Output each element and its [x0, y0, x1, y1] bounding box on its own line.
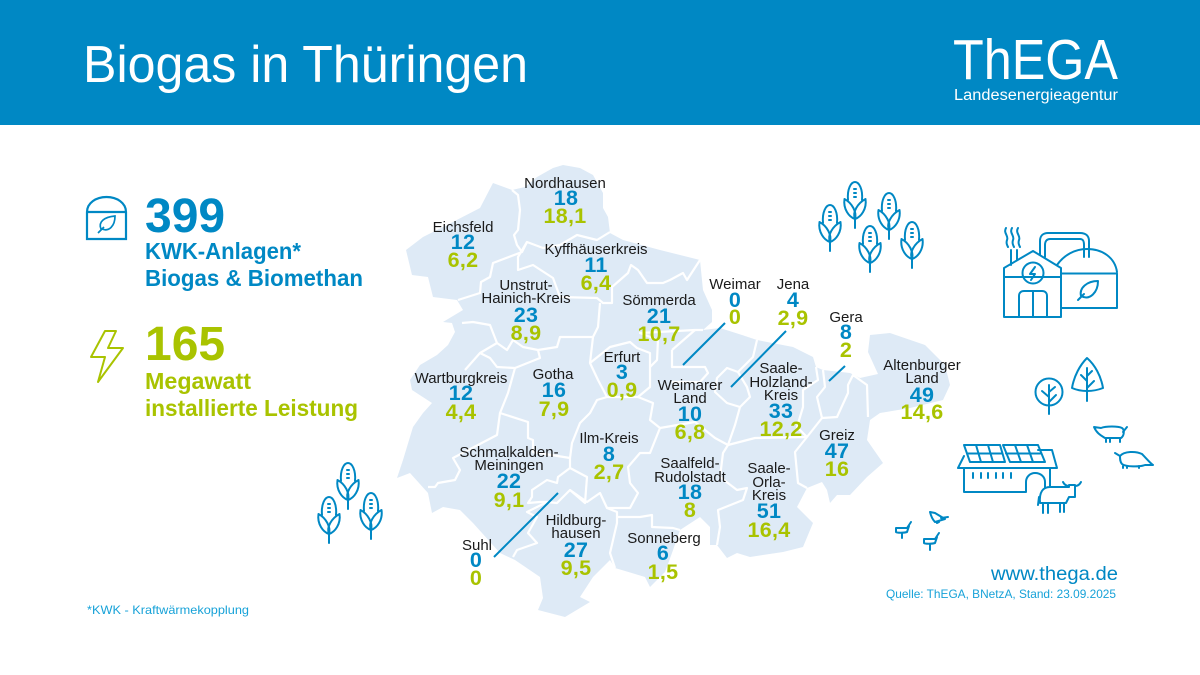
label: Gotha: Gotha — [533, 366, 574, 383]
stat: KWK plants — [87, 190, 363, 291]
label: Kyffhäuserkreis: 6,4 — [581, 271, 611, 295]
label: Saalfeld-Rudolstadt: 18 — [678, 480, 702, 504]
label: Ilm-Kreis: Ilm-Kreis — [579, 430, 639, 447]
label: Schmalkalden-Meiningen: Meiningen — [474, 457, 544, 474]
label: Sömmerda: Sömmerda — [622, 292, 696, 309]
label: Schmalkalden-Meiningen — [459, 444, 559, 512]
label: Eichsfeld: 12 — [451, 230, 475, 254]
label: Suhl: 0 — [470, 548, 482, 572]
label: Hildburghausen — [546, 512, 606, 580]
icon: pointed tree — [1072, 358, 1103, 401]
label: Schmalkalden-Meiningen: Schmalkalden- — [459, 444, 559, 461]
number 399: 399 — [145, 190, 225, 243]
label: Altenburger Land: Altenburger — [883, 357, 961, 374]
label: Gera: 8 — [840, 320, 852, 344]
leader line: Gera — [829, 366, 845, 381]
caption: Megawatt — [145, 368, 251, 394]
label: Weimarer Land: Land — [673, 390, 707, 407]
label: Weimarer Land: 10 — [678, 402, 702, 426]
label: Saale-Holzland-Kreis: Saale- — [759, 360, 803, 377]
label: Ilm-Kreis: 8 — [603, 442, 615, 466]
icon: corn group bottom left — [318, 463, 382, 543]
label: Nordhausen — [524, 175, 606, 228]
label: Jena: Jena — [777, 276, 810, 293]
label: Schmalkalden-Meiningen: 9,1 — [494, 488, 524, 512]
label: Erfurt — [604, 349, 641, 402]
label: Kyffhäuserkreis: 11 — [584, 253, 608, 277]
label: Saale-Holzland-Kreis: Holzland- — [749, 374, 813, 391]
label: Unstrut-Hainich-Kreis — [481, 277, 571, 345]
label: Unstrut-Hainich-Kreis: 8,9 — [511, 321, 541, 345]
label: Saalfeld-Rudolstadt: 8 — [684, 498, 696, 522]
label: Sömmerda — [622, 292, 696, 346]
label: Weimar — [709, 276, 761, 329]
label: Sonneberg: 1,5 — [648, 560, 678, 584]
label: Sömmerda: 21 — [647, 304, 671, 328]
label: Weimar: 0 — [729, 305, 741, 329]
label: Gera — [829, 309, 863, 362]
label: Saale-Orla-Kreis — [747, 460, 791, 542]
label: Saale-Holzland-Kreis: 33 — [769, 399, 793, 423]
label: Saalfeld-Rudolstadt — [654, 455, 727, 522]
label: Erfurt: Erfurt — [604, 349, 641, 366]
caption: installierte Leistung — [145, 395, 358, 421]
label: Sonneberg: Sonneberg — [627, 530, 701, 547]
label: Saale-Orla-Kreis: 51 — [757, 499, 781, 523]
label: Sömmerda: 10,7 — [637, 322, 681, 346]
icon: round tree — [1036, 378, 1062, 414]
label: Saalfeld-Rudolstadt: Saalfeld- — [660, 455, 720, 472]
label: Nordhausen: Nordhausen — [524, 175, 606, 192]
label: Kyffhäuserkreis: Kyffhäuserkreis — [544, 241, 648, 258]
icon: barn with solar roof — [958, 445, 1057, 492]
label: Wartburgkreis — [415, 370, 507, 424]
caption: KWK-Anlagen* — [145, 238, 301, 264]
leader line: Jena — [731, 331, 786, 387]
label: Altenburger Land: 49 — [910, 383, 934, 407]
website: www.thega.de — [990, 563, 1118, 585]
label: Kyffhäuserkreis — [544, 241, 648, 295]
label: Altenburger Land: 14,6 — [900, 400, 944, 424]
caption — [145, 238, 363, 291]
label: Greiz: 16 — [825, 457, 849, 481]
title: Biogas in Thüringen — [83, 36, 528, 94]
label: Jena: 2,9 — [778, 306, 808, 330]
label: Gera: 2 — [840, 338, 852, 362]
label: Erfurt: 3 — [616, 360, 628, 384]
leader line: Suhl — [494, 493, 558, 557]
label: Eichsfeld: 6,2 — [448, 248, 478, 272]
label: Saale-Holzland-Kreis: Kreis — [764, 387, 798, 404]
label: Jena — [777, 276, 810, 330]
icon: goose 3 — [924, 533, 939, 550]
label: Hildburghausen: Hildburg- — [546, 512, 606, 529]
logo: ThEGA: Landesenergieagentur — [954, 87, 1118, 104]
icon: lightning bolt — [91, 331, 123, 382]
icon: goose 2 — [896, 522, 911, 538]
label: Nordhausen: 18 — [554, 186, 578, 210]
icon: corn group top right — [819, 182, 923, 272]
logo: ThEGA: ThEGA — [953, 28, 1118, 92]
label: Saale-Orla-Kreis: 16,4 — [747, 518, 791, 542]
header banner — [0, 0, 1200, 125]
label: Unstrut-Hainich-Kreis: 23 — [514, 303, 538, 327]
label: Saale-Holzland-Kreis: 12,2 — [759, 417, 803, 441]
label: Gotha: 7,9 — [539, 397, 569, 421]
label: Saale-Orla-Kreis: Orla- — [752, 474, 786, 491]
label: Ilm-Kreis: 2,7 — [594, 460, 624, 484]
label: Suhl — [462, 537, 492, 590]
label: Weimar: Weimar — [709, 276, 761, 293]
icon: biogas plant — [1004, 228, 1117, 317]
label: Unstrut-Hainich-Kreis: Hainich-Kreis — [481, 290, 571, 307]
label: Weimarer Land: 6,8 — [675, 420, 705, 444]
label: Hildburghausen: 27 — [564, 538, 588, 562]
label: Jena: 4 — [787, 288, 799, 312]
label: Suhl: Suhl — [462, 537, 492, 554]
label: Wartburgkreis: 4,4 — [446, 400, 476, 424]
label: Eichsfeld: Eichsfeld — [433, 219, 493, 236]
caption: Biogas & Biomethan — [145, 265, 363, 291]
label: Schmalkalden-Meiningen: 22 — [497, 469, 521, 493]
icon: pig 2 — [1115, 452, 1153, 468]
stat: megawatt — [91, 318, 358, 421]
label: Gera: Gera — [829, 309, 863, 326]
icon: biogas dome — [87, 197, 126, 239]
label: Saalfeld-Rudolstadt: Rudolstadt — [654, 469, 727, 486]
label: Wartburgkreis: Wartburgkreis — [415, 370, 507, 387]
label: Saale-Orla-Kreis: Kreis — [752, 487, 786, 504]
label: Gotha — [533, 366, 574, 421]
label: Altenburger Land — [883, 357, 961, 424]
footnote: *KWK - Kraftwärmekopplung — [87, 603, 249, 617]
label: Weimar: 0 — [729, 288, 741, 312]
label: Weimarer Land: Weimarer — [658, 377, 722, 394]
label: Suhl: 0 — [470, 566, 482, 590]
label: Greiz: 47 — [825, 439, 849, 463]
leader line: Weimar — [683, 323, 725, 365]
label: Sonneberg: 6 — [657, 541, 669, 565]
label: Saale-Orla-Kreis: Saale- — [747, 460, 791, 477]
label: Unstrut-Hainich-Kreis: Unstrut- — [499, 277, 553, 294]
label: Altenburger Land: Land — [905, 370, 939, 387]
caption — [145, 368, 358, 421]
map of Thuringia — [397, 165, 950, 617]
label: Saale-Holzland-Kreis — [749, 360, 813, 441]
source: Quelle: ThEGA, BNetzA, Stand: 23.09.2025 — [886, 587, 1116, 601]
icon: pig 1 — [1094, 426, 1127, 442]
label: Wartburgkreis: 12 — [449, 381, 473, 405]
label: Ilm-Kreis — [579, 430, 639, 484]
label: Hildburghausen: hausen — [551, 525, 601, 542]
icon: cow — [1038, 482, 1081, 513]
label: Eichsfeld — [433, 219, 493, 272]
number 165: 165 — [145, 318, 225, 371]
label: Nordhausen: 18,1 — [543, 204, 587, 228]
label: Gotha: 16 — [542, 378, 566, 402]
label: Sonneberg — [627, 530, 701, 584]
icon: goose 1 — [930, 512, 948, 523]
label: Greiz — [819, 427, 855, 481]
label: Hildburghausen: 9,5 — [561, 556, 591, 580]
label: Weimarer Land — [658, 377, 722, 444]
label: Erfurt: 0,9 — [607, 378, 637, 402]
label: Greiz: Greiz — [819, 427, 855, 444]
